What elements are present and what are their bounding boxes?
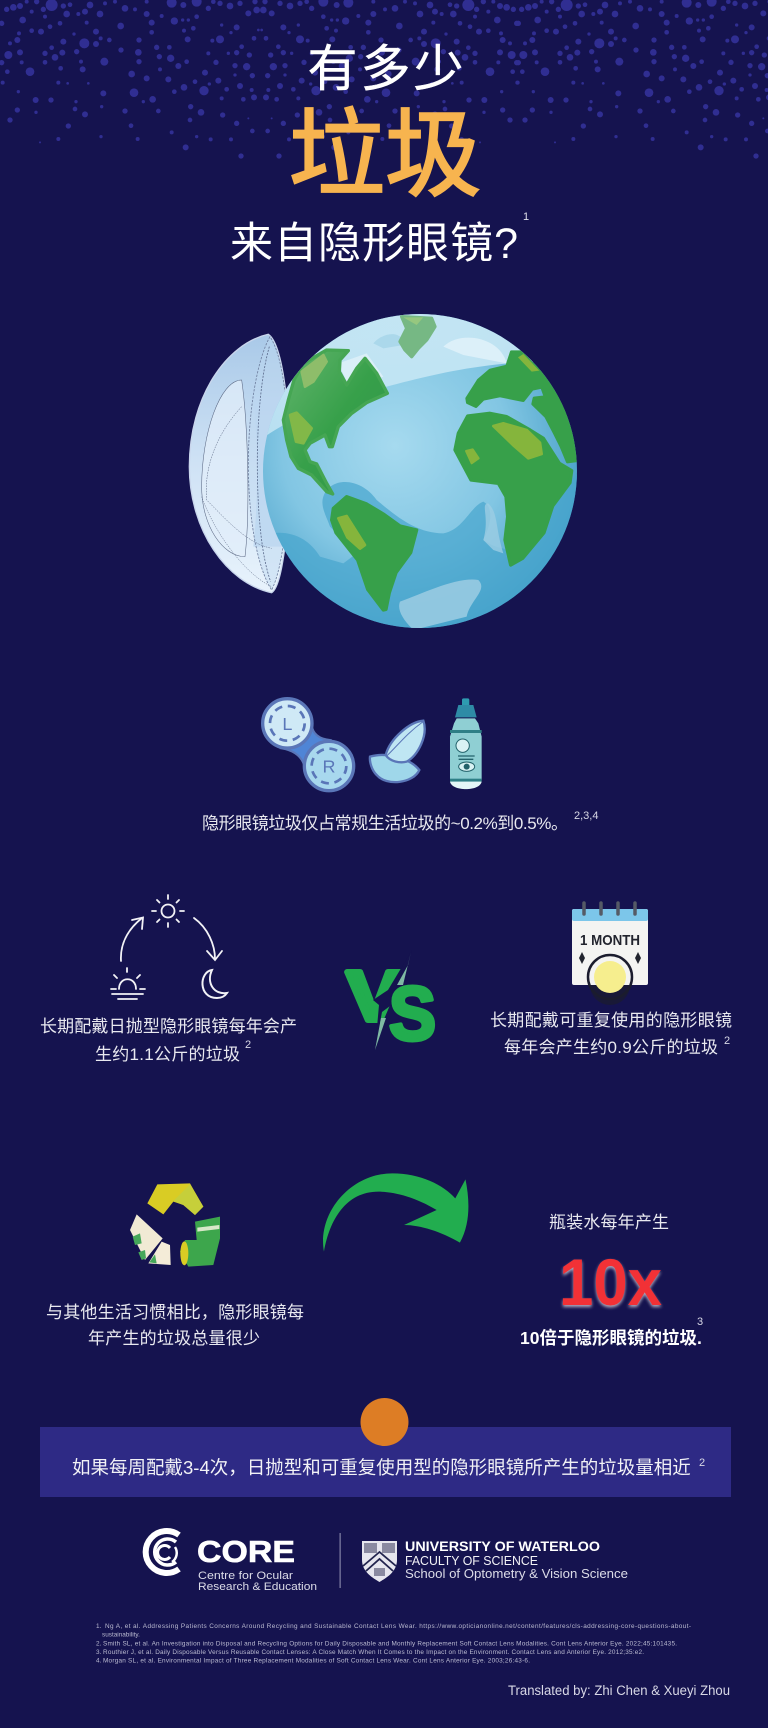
lens case bbox=[263, 699, 354, 791]
CORE emblem bbox=[146, 1531, 179, 1573]
letter V: V bbox=[347, 957, 401, 1035]
solution bottle bbox=[450, 698, 482, 789]
icon: 1 month calendar bbox=[572, 903, 648, 1005]
africa bbox=[455, 413, 572, 565]
title line 1: 有多少 bbox=[308, 41, 464, 97]
CORE subtitle: Centre for Ocular bbox=[198, 1570, 293, 1582]
bottled water caption: 10倍于隐形眼镜的垃圾. bbox=[520, 1328, 702, 1348]
pair of lenses bbox=[370, 721, 425, 782]
reusable text: 长期配戴可重复使用的隐形眼镜 bbox=[490, 1010, 732, 1030]
polar ice highlight bbox=[267, 314, 534, 435]
globe bbox=[257, 300, 583, 633]
references bbox=[96, 1623, 691, 1664]
banner text: 如果每周配戴3-4次，日抛型和可重复使用型的隐形眼镜所产生的垃圾量相近 bbox=[72, 1457, 691, 1478]
references: Smith SL, et al. An Investigation into Disposal and Recycling Options for Daily Disposable and Monthly Replacement Soft Contact Lens Modalities. Cont Lens Anterior Eye. 2022;45:101435. bbox=[103, 1640, 677, 1648]
references: 3. bbox=[96, 1649, 102, 1656]
panel: bottled water comparison bbox=[520, 1213, 703, 1348]
references: Routhier J, et al. Daily Disposable Versus Reusable Contact Lenses: A Close Match When It Comes to the Impact on the Environment. Contact Lens and Anterior Eye. 2012;35:e2. bbox=[103, 1649, 644, 1656]
icon: day and night cycle bbox=[111, 895, 227, 999]
ocean shade patches bbox=[270, 334, 583, 633]
footnote marker: 2 bbox=[699, 1457, 705, 1469]
CORE wordmark: CORE bbox=[197, 1535, 295, 1569]
contact lens bbox=[189, 334, 289, 593]
school: School of Optometry & Vision Science bbox=[405, 1567, 628, 1581]
footnote marker: 3 bbox=[697, 1316, 703, 1328]
crest bbox=[362, 1541, 397, 1582]
greenland bbox=[400, 317, 435, 357]
references: 1. bbox=[96, 1623, 102, 1630]
daily disposable text: 长期配戴日抛型隐形眼镜每年会产 bbox=[40, 1017, 297, 1036]
footnote markers: 2,3,4 bbox=[574, 810, 598, 822]
banner: weekly wear bbox=[40, 1398, 731, 1497]
faculty: FACULTY OF SCIENCE bbox=[405, 1554, 538, 1568]
divider bbox=[340, 1533, 341, 1588]
panel: daily disposable bbox=[40, 895, 297, 1064]
logo: University of Waterloo bbox=[362, 1539, 628, 1582]
references: Morgan SL, et al. Environmental Impact of Three Replacement Modalities of Soft Contact Lens Wear. Cont Lens Anterior Eye. 2003;26:43-6. bbox=[103, 1658, 530, 1664]
panel: reusable lenses: 每年会产生约0.9公斤的垃圾 bbox=[504, 1038, 718, 1057]
title footnote marker: 1 bbox=[523, 211, 529, 223]
panel: compared with other habits bbox=[46, 1183, 304, 1348]
lightning slash bbox=[397, 952, 411, 985]
references: sustainability. bbox=[102, 1632, 140, 1638]
lens case: L bbox=[282, 714, 292, 734]
icons: lens case, lenses, solution bottle bbox=[263, 698, 482, 791]
references: 2. bbox=[96, 1640, 102, 1648]
stat text: share of household waste: 隐形眼镜垃圾仅占常规生活垃圾的~0.2%到0.5%。 bbox=[202, 814, 568, 833]
icon: recycling materials bbox=[130, 1183, 220, 1267]
icon: 1 month calendar: 1 MONTH bbox=[580, 932, 640, 949]
university name: UNIVERSITY OF WATERLOO bbox=[405, 1539, 600, 1554]
illustration: contact lens and globe bbox=[189, 300, 583, 633]
panel: reusable lenses bbox=[490, 903, 732, 1057]
habits text: 与其他生活习惯相比，隐形眼镜每 bbox=[46, 1303, 304, 1322]
title highlight word: 垃圾 bbox=[289, 102, 481, 209]
references: Ng A, et al. Addressing Patients Concerns Around Recycling and Sustainable Contact Lens Wear. https://www.opticianonline.net/content/features/cls-addressing-core-questions-about- bbox=[105, 1623, 691, 1630]
big number 10x: 10x bbox=[559, 1245, 662, 1319]
orange circle bbox=[360, 1398, 408, 1446]
speckled star pattern bbox=[0, 0, 768, 159]
title bbox=[230, 41, 529, 268]
title line 3: 来自隐形眼镜? bbox=[230, 220, 518, 268]
lens case: R bbox=[322, 757, 335, 777]
eurasia bbox=[467, 352, 578, 462]
arrow: curved green bbox=[323, 1173, 468, 1252]
north america bbox=[283, 350, 387, 494]
panel: compared with other habits: 年产生的垃圾总量很少 bbox=[88, 1329, 260, 1348]
references: 4. bbox=[96, 1658, 102, 1664]
translator credit: Translated by: Zhi Chen & Xueyi Zhou bbox=[508, 1683, 730, 1698]
footnote marker: 2 bbox=[245, 1039, 251, 1051]
footnote marker: 2 bbox=[724, 1035, 730, 1047]
VS badge bbox=[347, 950, 436, 1057]
south america bbox=[332, 497, 417, 610]
panel: daily disposable: 生约1.1公斤的垃圾 bbox=[95, 1045, 240, 1064]
logo: CORE: Research & Education bbox=[198, 1581, 317, 1593]
bottled water label: 瓶装水每年产生 bbox=[549, 1213, 669, 1232]
logo: CORE bbox=[146, 1531, 317, 1593]
banner panel bbox=[40, 1427, 731, 1497]
letter S: S bbox=[389, 972, 436, 1057]
dark slash bbox=[373, 950, 412, 1050]
